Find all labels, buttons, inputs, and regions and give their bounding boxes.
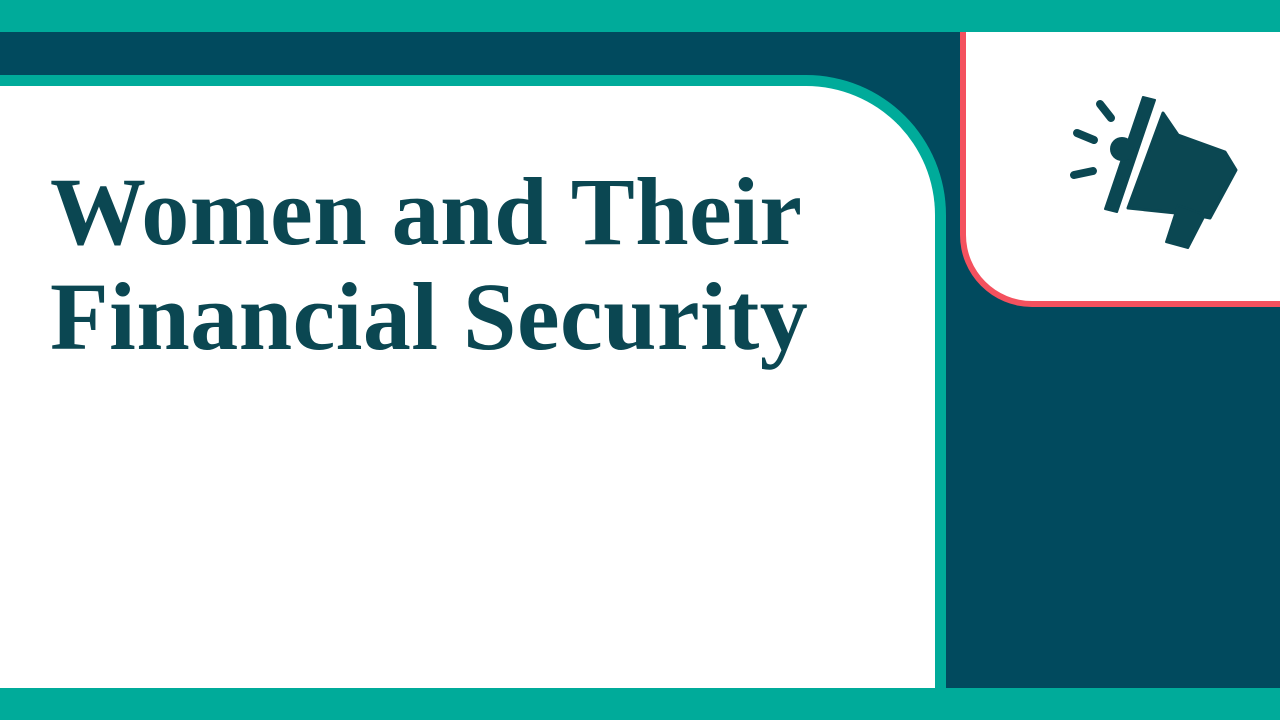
top band	[0, 0, 1280, 32]
icon: megaphone	[1070, 96, 1238, 249]
panel: icon box	[960, 32, 1280, 307]
panel: main white title panel	[0, 75, 946, 688]
title: Financial Security	[50, 263, 808, 370]
bottom band	[0, 688, 1280, 720]
title	[50, 158, 808, 370]
title: Women and Their	[50, 158, 803, 265]
